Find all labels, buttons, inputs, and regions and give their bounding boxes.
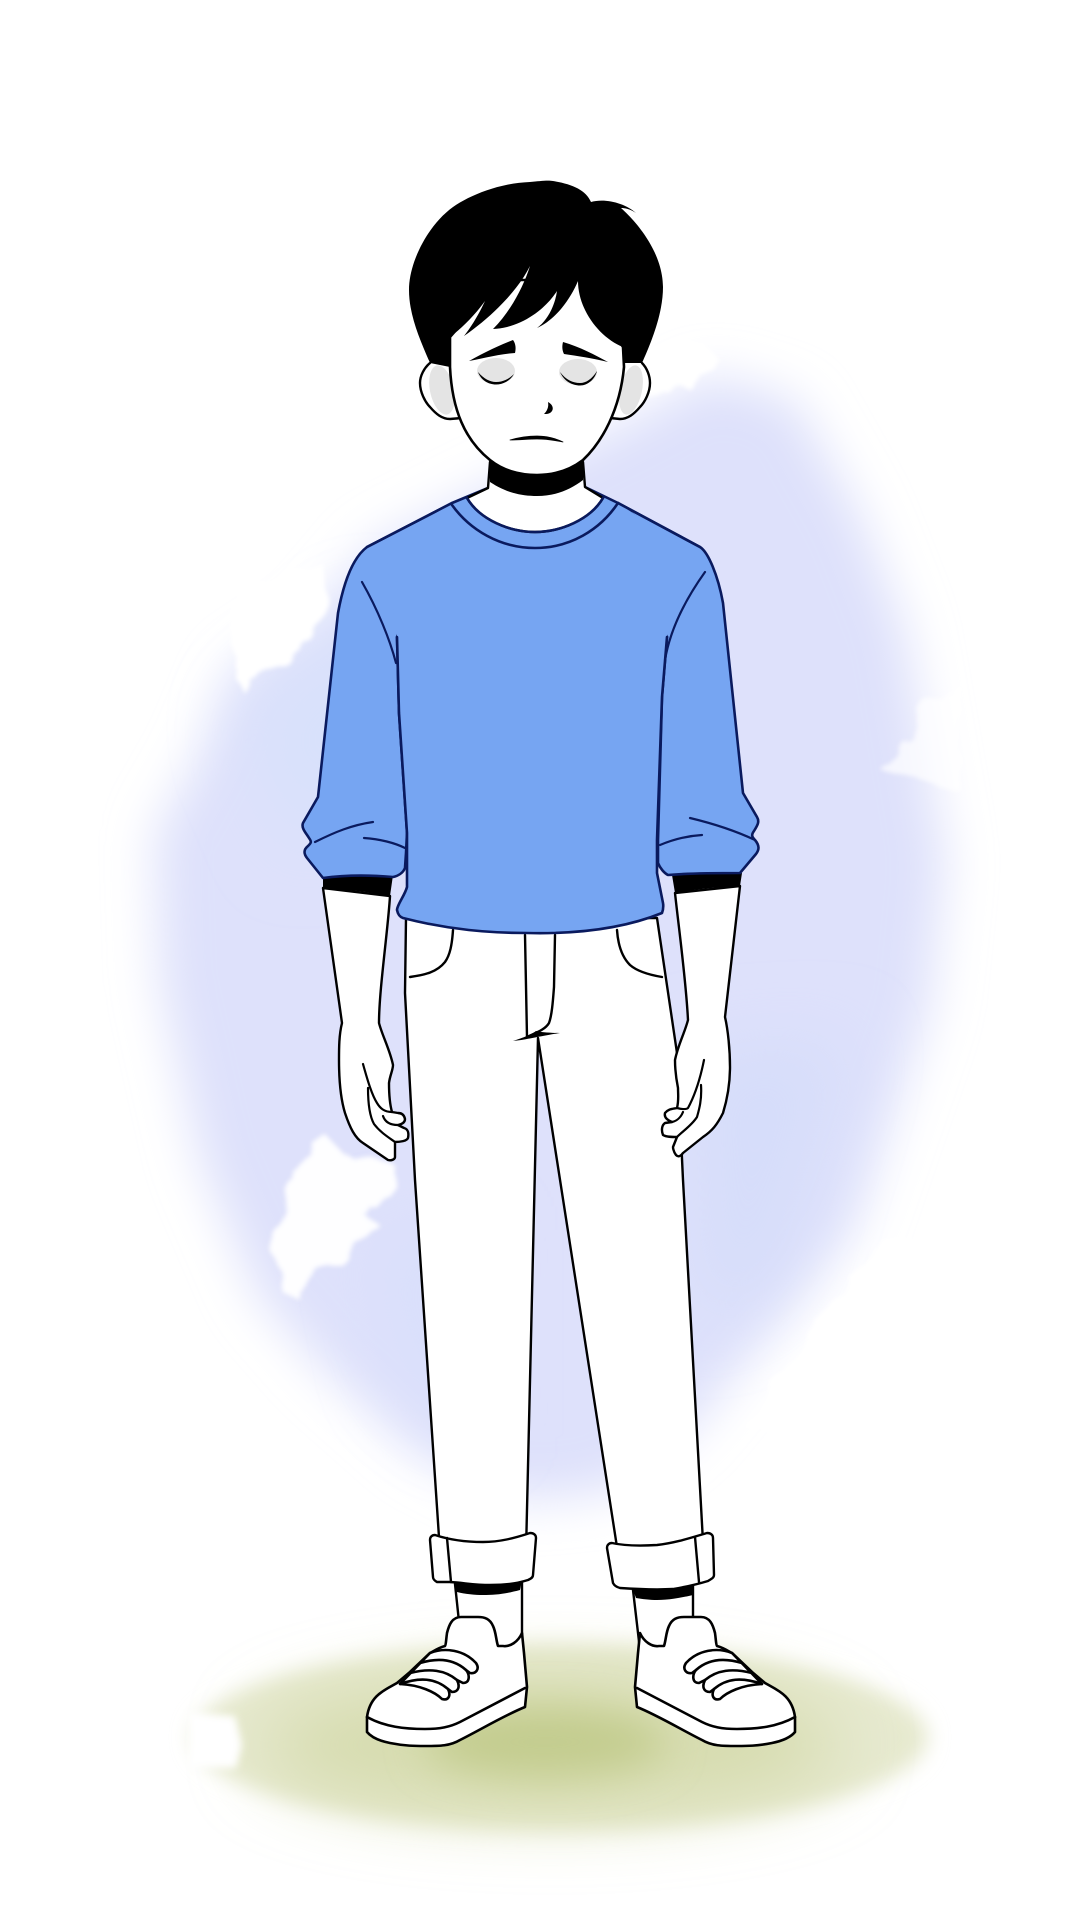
left trouser cuff [430,1533,536,1585]
sleeve seams and folds [315,572,755,848]
left leg sock [455,1580,522,1650]
torso [385,487,695,933]
left arm and hand [323,875,408,1160]
left ear [420,363,464,419]
eyelid shading [477,358,597,385]
closed eyes [478,371,597,386]
left sleeve [303,503,452,878]
ground: olive watercolor shadow [188,1644,928,1830]
right shoe [635,1617,795,1746]
left shoe [367,1617,527,1746]
right ear [608,363,650,419]
face [450,280,624,475]
right leg sock [633,1586,693,1650]
collar [452,503,618,548]
white brush streaks on the blob [228,340,960,1440]
shoe laces [400,1650,478,1699]
right arm and hand [662,873,742,1156]
right trouser cuff [607,1533,714,1589]
shirt [303,487,758,933]
eyebrows [469,340,608,362]
right sleeve black underside [672,873,742,893]
figure: boy [303,181,795,1746]
nose [544,402,553,414]
neck [467,458,603,532]
right sleeve [618,503,758,875]
pockets [410,930,453,977]
pants [405,918,704,1560]
shoulder line [367,487,700,547]
left sleeve black underside [323,875,393,896]
fly [525,935,555,1037]
hair [409,181,663,367]
mouth [510,436,563,442]
shoe laces [684,1650,762,1699]
background: lavender watercolor blob [155,340,960,1502]
